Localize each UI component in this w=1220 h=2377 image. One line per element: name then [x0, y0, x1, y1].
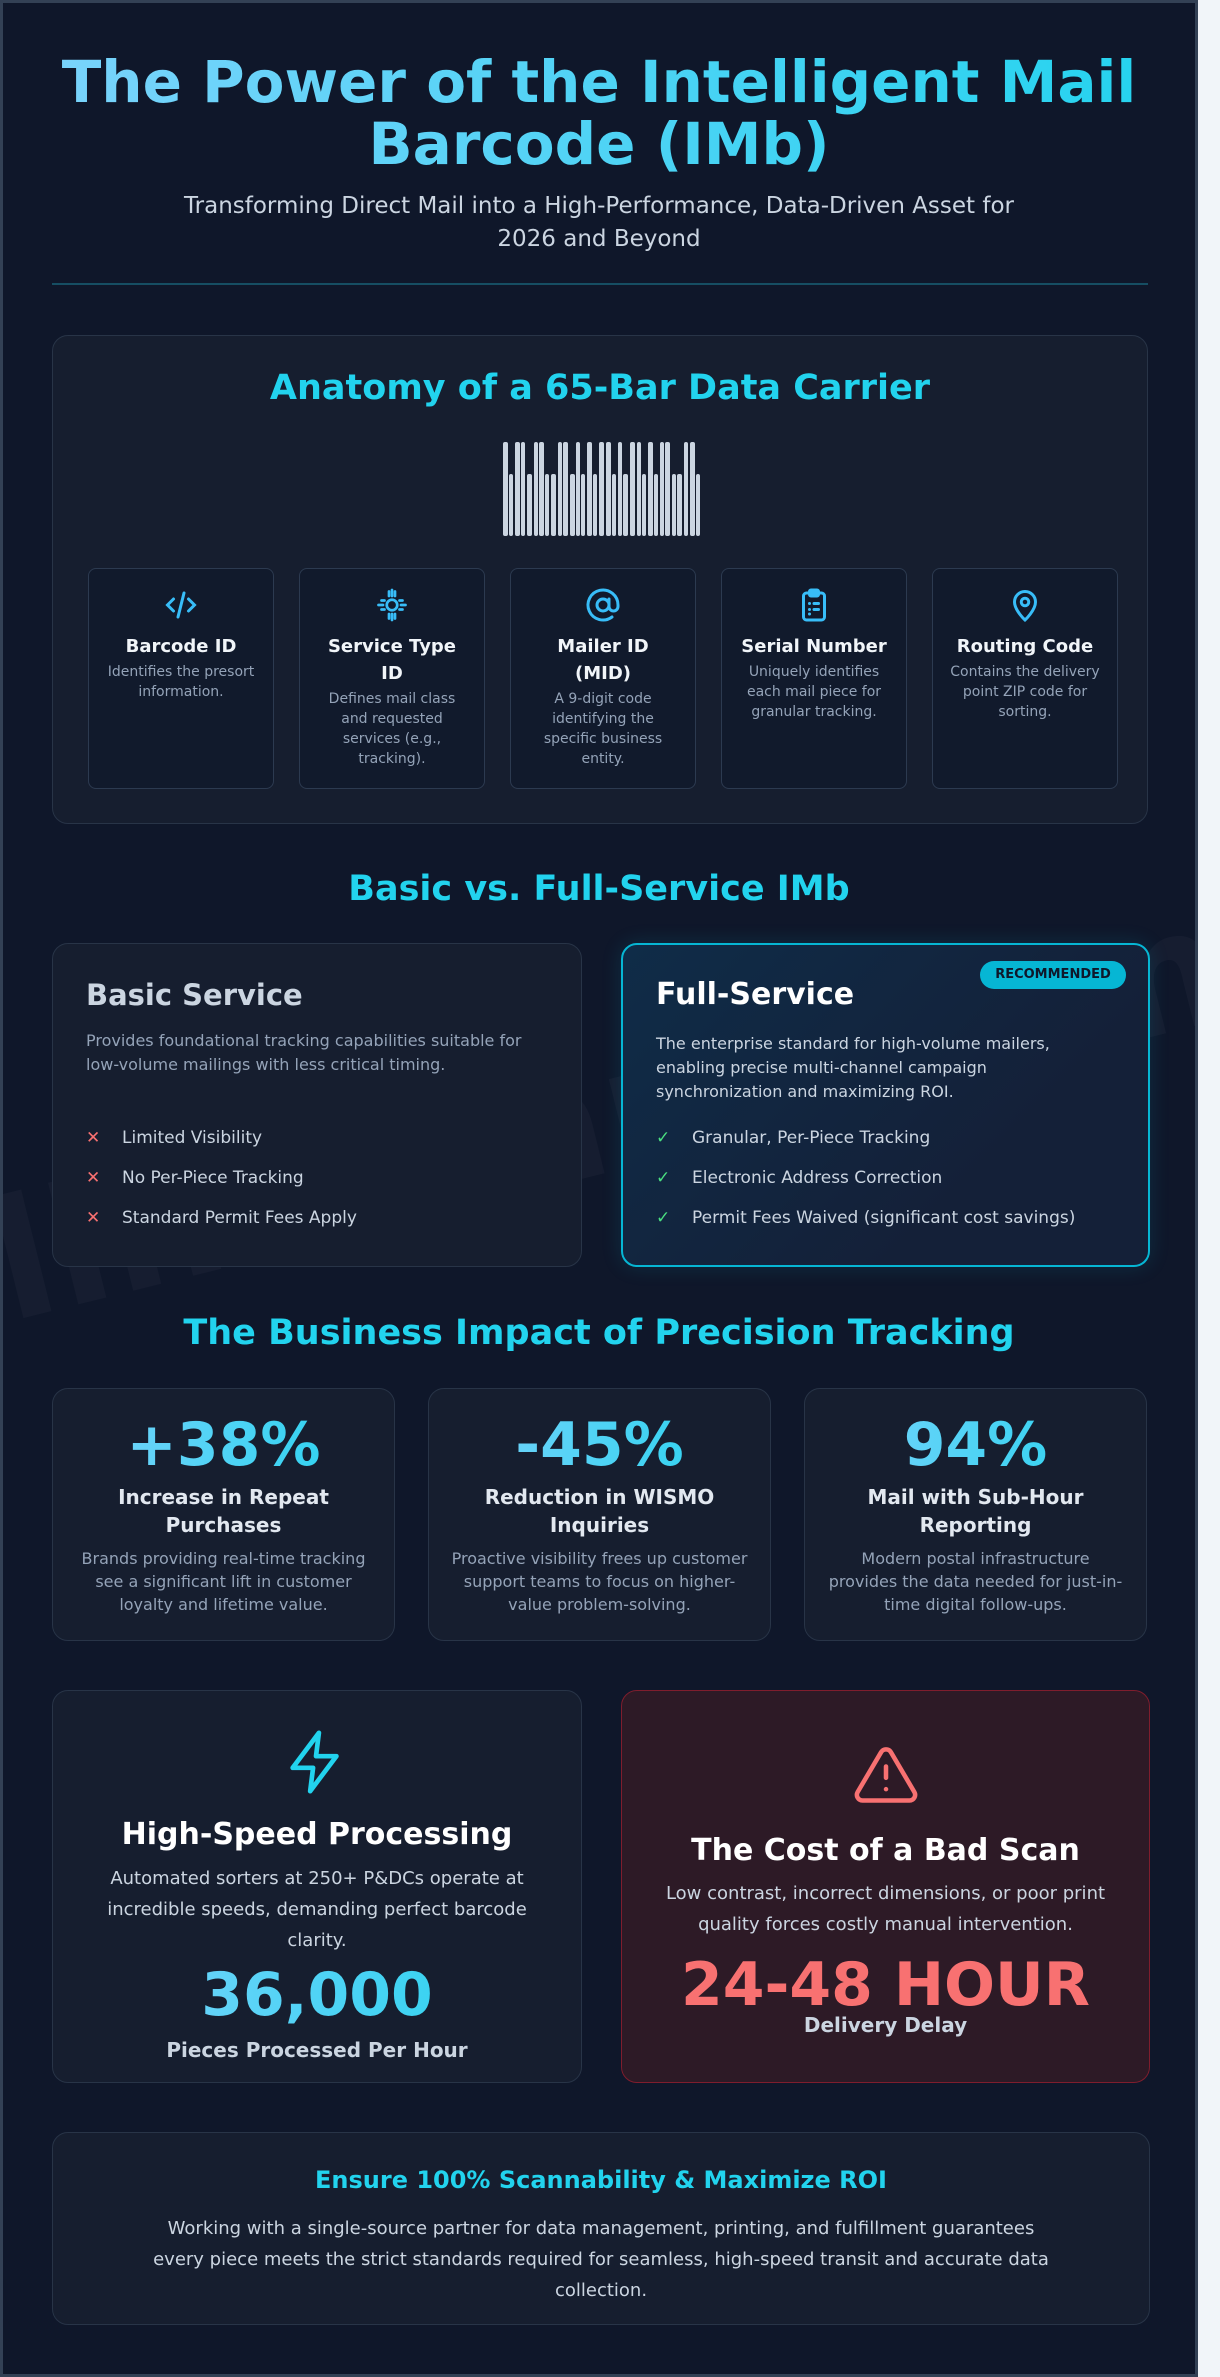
title [3, 51, 1195, 175]
panel: basic service: Provides foundational tracking capabilities suitable for low-volume mailings with less critical timing. [86, 1031, 521, 1074]
card: barcode id [88, 568, 274, 789]
card: routing: Routing Code [957, 636, 1093, 657]
icon: at sign [586, 588, 620, 622]
stat: wismo [428, 1388, 771, 1641]
panel: high-speed processing: Automated sorters at 250+ P&DCs operate at incredible speeds, demanding perfect barcode clarity. [107, 1868, 527, 1951]
subtitle: Transforming Direct Mail into a High-Performance, Data-Driven Asset for [184, 193, 1014, 219]
panel: anatomy [52, 335, 1148, 824]
panel: footer cta: Ensure 100% Scannability & Maximize ROI [315, 2166, 887, 2194]
badge: recommended: RECOMMENDED [995, 967, 1111, 982]
card: routing: Contains the delivery point ZIP code for sorting. [950, 664, 1100, 720]
card: service type: Service Type ID [328, 636, 456, 684]
heading: anatomy: Anatomy of a 65-Bar Data Carrier [270, 368, 930, 408]
stat: sub-hour: Modern postal infrastructure provides the data needed for just-in-time digital follow-ups. [829, 1549, 1122, 1614]
panel: cost of bad scan: The Cost of a Bad Scan [691, 1833, 1080, 1868]
stat: repeat purchases: Increase in Repeat Purchases [118, 1485, 329, 1537]
list: full benefits: ✓ [656, 1208, 670, 1228]
list: basic drawbacks: ✕ [86, 1208, 100, 1228]
list: basic drawbacks: Limited Visibility [122, 1128, 262, 1148]
list: basic drawbacks: No Per-Piece Tracking [122, 1168, 304, 1188]
card: routing [932, 568, 1118, 789]
icon: code [166, 592, 196, 618]
stat: sub-hour: Mail with Sub-Hour Reporting [867, 1485, 1084, 1537]
panel: cost of bad scan: Low contrast, incorrect dimensions, or poor print quality forces costly manual intervention. [666, 1883, 1105, 1935]
stat: repeat purchases: Brands providing real-time tracking see a significant lift in customer loyalty and lifetime value. [82, 1549, 365, 1614]
heading: business impact: The Business Impact of Precision Tracking [183, 1313, 1015, 1353]
panel: cost of bad scan: Delivery Delay [804, 2013, 967, 2037]
title: Barcode (IMb) [368, 110, 830, 178]
subtitle: 2026 and Beyond [497, 226, 701, 252]
card: service type [299, 568, 485, 789]
list: basic drawbacks: Standard Permit Fees Apply [122, 1208, 357, 1228]
title: The Power of the Intelligent Mail [62, 48, 1136, 116]
list: full benefits: Electronic Address Correction [692, 1168, 942, 1188]
stat: sub-hour [804, 1388, 1147, 1641]
panel: high-speed processing [52, 1690, 582, 2083]
panel: basic service [52, 943, 582, 1267]
icon: map pin [1013, 590, 1037, 622]
stat: wismo: Proactive visibility frees up customer support teams to focus on higher-value problem-solving. [452, 1549, 747, 1614]
icon: chip [377, 588, 407, 622]
stat: wismo: -45% [515, 1410, 684, 1480]
stat: 36,000: 36,000 [201, 1960, 433, 2030]
list: full benefits: Permit Fees Waived (significant cost savings) [692, 1208, 1075, 1228]
list: basic drawbacks: ✕ [86, 1168, 100, 1188]
heading: basic vs full: Basic vs. Full-Service IMb [348, 869, 850, 909]
panel: full service: Full-Service [656, 977, 854, 1012]
list: full benefits: Granular, Per-Piece Tracking [692, 1128, 930, 1148]
card: mailer id: A 9-digit code identifying the specific business entity. [544, 691, 662, 767]
icon: warning [854, 1747, 918, 1803]
card: serial: Serial Number [741, 636, 887, 657]
list: basic drawbacks [86, 1128, 357, 1228]
list: basic drawbacks: ✕ [86, 1128, 100, 1148]
list: full benefits: ✓ [656, 1128, 670, 1148]
stat: sub-hour: 94% [904, 1410, 1047, 1480]
panel: high-speed processing: Pieces Processed Per Hour [166, 2038, 468, 2062]
icon: clipboard [802, 588, 826, 622]
badge: recommended [980, 961, 1126, 989]
stat: repeat purchases: +38% [127, 1410, 320, 1480]
stat: repeat purchases [52, 1388, 395, 1641]
stat: 24-48 hour: 24-48 HOUR [681, 1950, 1090, 2020]
card: mailer id [510, 568, 696, 789]
card: serial [721, 568, 907, 789]
panel: basic service: Basic Service [86, 978, 303, 1012]
panel: footer cta: Working with a single-source partner for data management, printing, and fulfillment guarantees every piece meets the strict standards required for seamless, high-speed transit and accurate data collection. [153, 2218, 1049, 2301]
stat: wismo: Reduction in WISMO Inquiries [485, 1485, 714, 1537]
card: service type: Defines mail class and requested services (e.g., tracking). [329, 691, 455, 767]
icon: lightning [290, 1730, 339, 1794]
subtitle [184, 193, 1014, 252]
card: barcode id: Barcode ID [126, 636, 236, 657]
card: serial: Uniquely identifies each mail piece for granular tracking. [747, 664, 881, 720]
stat: 36,000 [53, 1959, 581, 2031]
card: barcode id: Identifies the presort information. [108, 664, 254, 700]
barcode graphic [503, 442, 700, 536]
panel: full service: The enterprise standard for high-volume mailers, enabling precise multi-channel campaign synchronization and maximizing ROI. [656, 1034, 1050, 1101]
list: full benefits: ✓ [656, 1168, 670, 1188]
panel: cost of bad scan [621, 1690, 1150, 2083]
list: full benefits [656, 1128, 1075, 1228]
panel: footer cta [52, 2132, 1150, 2325]
panel: full service [621, 943, 1150, 1267]
card: mailer id: Mailer ID (MID) [557, 636, 649, 684]
panel: high-speed processing: High-Speed Processing [122, 1817, 512, 1852]
